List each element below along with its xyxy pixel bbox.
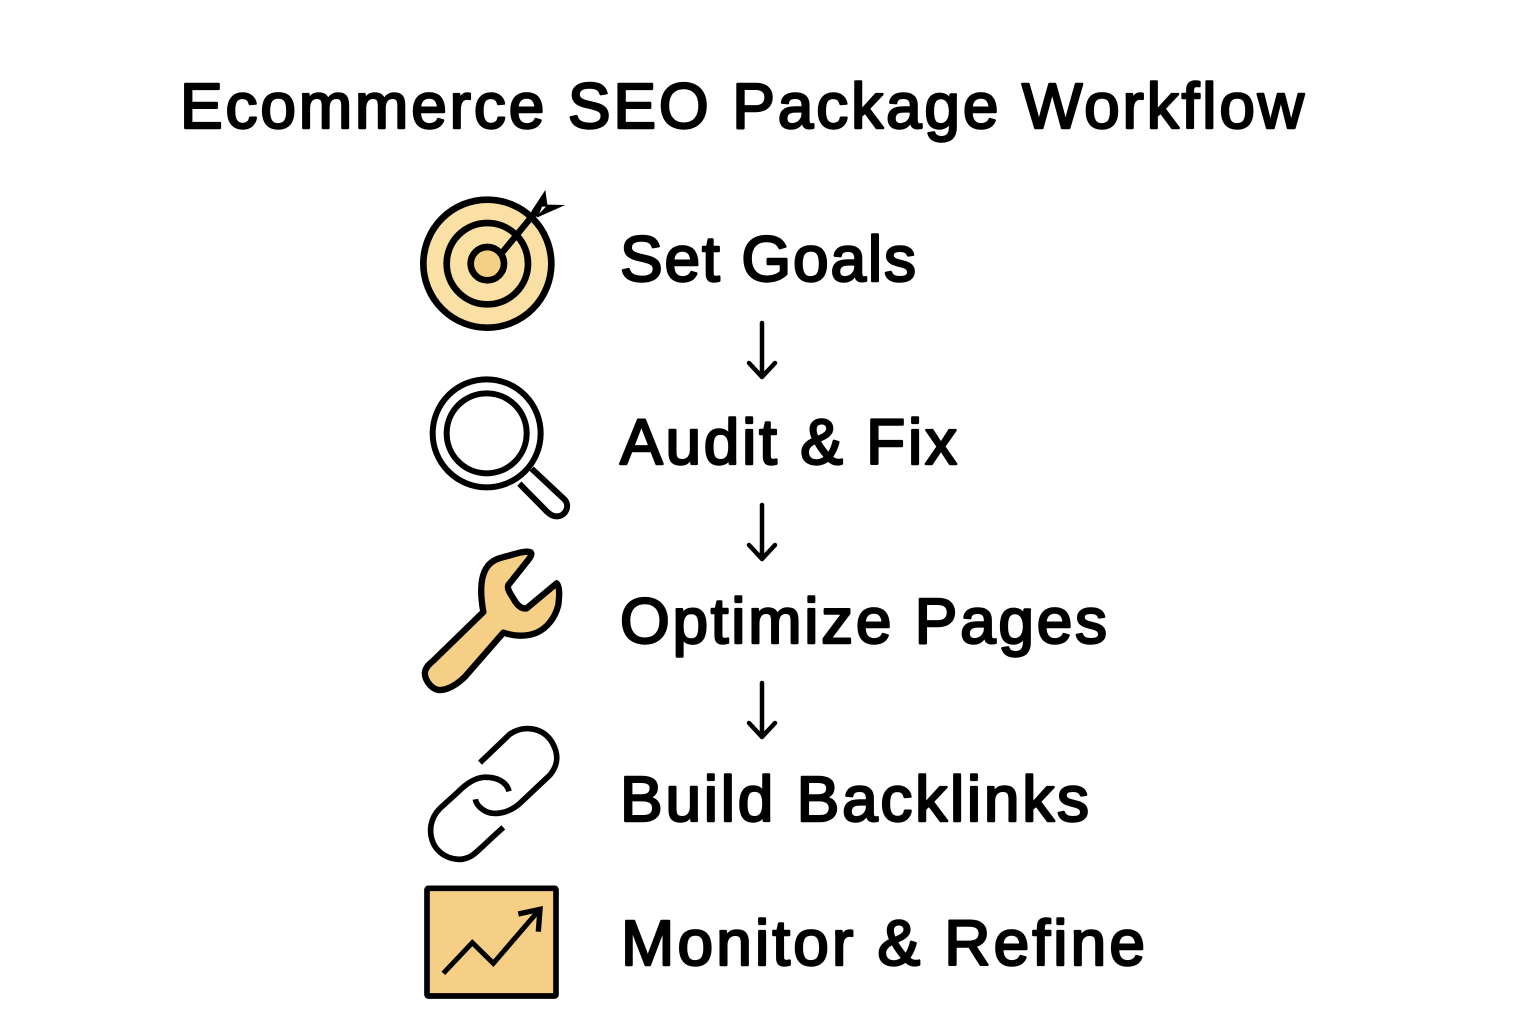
icon: wrench xyxy=(425,552,559,690)
arrow: goals to audit xyxy=(749,323,775,377)
step label: Audit & Fix: Audit & Fix xyxy=(620,406,957,478)
title: Ecommerce SEO Package Workflow xyxy=(180,70,1305,142)
step label: Build Backlinks: Build Backlinks xyxy=(620,763,1089,835)
arrow: optimize to backlinks xyxy=(749,683,775,737)
icon: chain link xyxy=(431,729,557,859)
arrow: audit to optimize xyxy=(749,505,775,559)
step label: Set Goals: Set Goals xyxy=(620,223,916,295)
step label: Optimize Pages: Optimize Pages xyxy=(620,585,1107,657)
icon: target with arrow xyxy=(423,190,565,328)
icon: growth chart xyxy=(427,888,556,996)
step label: Monitor & Refine: Monitor & Refine xyxy=(621,907,1145,979)
icon: magnifying glass xyxy=(433,379,567,516)
